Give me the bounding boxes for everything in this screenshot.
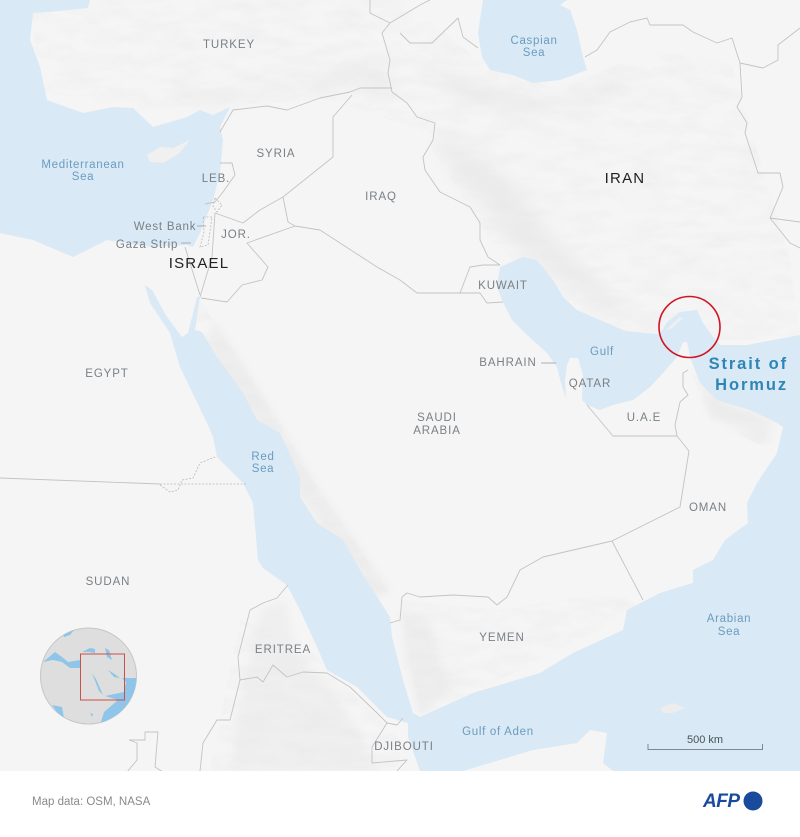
country labels: SUDAN: [86, 576, 130, 588]
afp logo: [702, 791, 762, 812]
label: israel: ISRAEL: [169, 255, 229, 272]
country labels: OMAN: [689, 502, 727, 514]
country labels: LEB.: [202, 173, 230, 185]
afp logo: AFP: [702, 791, 740, 812]
country labels: [85, 39, 727, 753]
label: iran: IRAN: [605, 170, 645, 187]
country labels: BAHRAIN: [479, 357, 537, 369]
country labels: SYRIA: [256, 148, 296, 160]
island: qeshm: [665, 317, 683, 331]
water labels: Mediterranean: [41, 159, 125, 171]
country labels: JOR.: [221, 229, 251, 241]
water labels: [41, 35, 751, 738]
water labels: Red: [251, 451, 275, 463]
highlight circle: strait of hormuz: [659, 296, 720, 358]
country labels: DJIBOUTI: [374, 741, 434, 753]
country labels: SAUDI: [417, 412, 457, 424]
water labels: Gulf of Aden: [462, 726, 534, 738]
footer background: [0, 771, 800, 837]
water labels: Caspian: [510, 35, 558, 47]
source credit: Map data: OSM, NASA: [32, 796, 151, 808]
country labels: TURKEY: [203, 39, 255, 51]
water labels: Sea: [523, 47, 545, 59]
label: strait of hormuz: [709, 355, 788, 394]
red sea, gulf, arabian sea and gulf of aden: [145, 257, 800, 771]
locator rectangle: [80, 654, 124, 700]
scale bar: [648, 734, 762, 750]
water labels: Arabian: [707, 613, 751, 625]
island: cyprus: [147, 140, 190, 163]
country labels: KUWAIT: [478, 280, 528, 292]
label: west bank with leader: West Bank: [134, 221, 196, 233]
terrain shading: [212, 70, 760, 762]
scale bar: 500 km: [687, 734, 723, 746]
country labels: QATAR: [569, 378, 611, 390]
locator globe: [40, 628, 137, 725]
label: gaza strip with leader: Gaza Strip: [116, 239, 178, 251]
caspian sea: [478, 0, 587, 83]
country labels: EGYPT: [85, 368, 129, 380]
country labels: ARABIA: [413, 425, 461, 437]
country labels: U.A.E: [627, 412, 661, 424]
country labels: ERITREA: [255, 644, 311, 656]
country labels: YEMEN: [479, 632, 525, 644]
water labels: Sea: [72, 171, 94, 183]
label: strait of hormuz: Strait of: [709, 355, 788, 373]
water labels: Sea: [718, 626, 740, 638]
country labels: IRAQ: [365, 191, 397, 203]
water labels: Gulf: [590, 346, 614, 358]
mediterranean sea: [0, 0, 230, 257]
leader: bahrain: [541, 362, 556, 364]
water labels: Sea: [252, 463, 274, 475]
island: socotra: [660, 703, 685, 713]
label: strait of hormuz: Hormuz: [715, 376, 788, 394]
